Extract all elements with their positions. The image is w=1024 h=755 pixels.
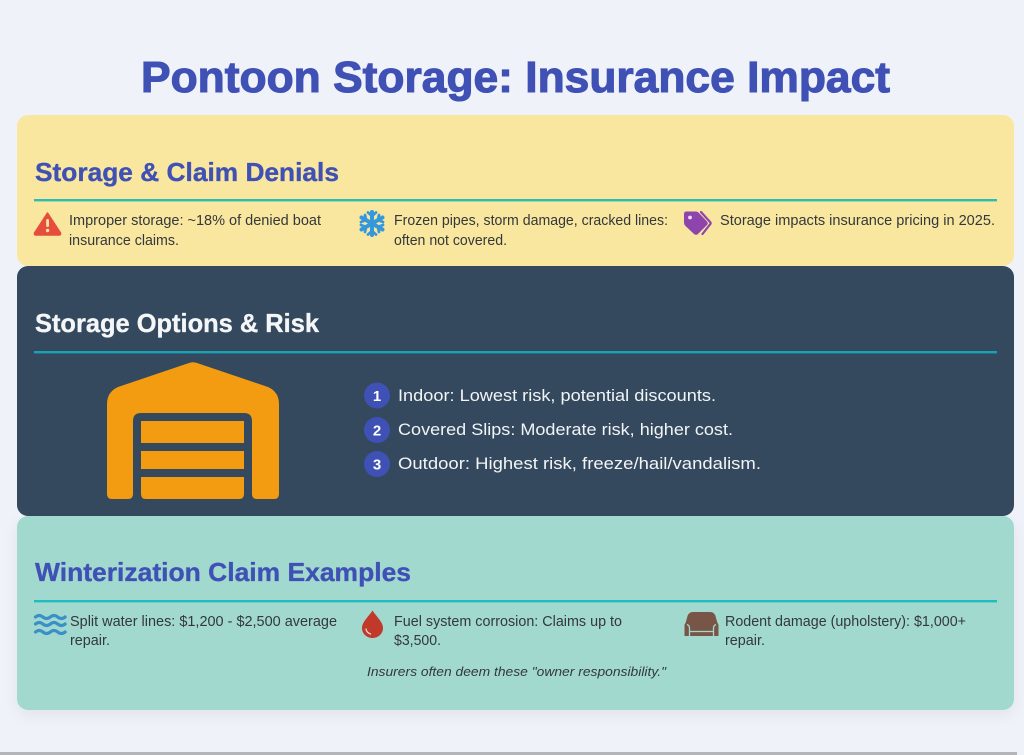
text: fuel system corrosion: $3,500.	[394, 633, 441, 649]
icon: snowflake	[361, 212, 383, 235]
page footer bar	[0, 752, 1017, 755]
heading: storage options and risk: Storage Options & Risk	[35, 308, 320, 338]
item: outdoor: 3	[373, 456, 381, 474]
icon: water waves	[36, 616, 65, 634]
text: frozen pipes: Frozen pipes, storm damage, cracked lines:	[394, 213, 668, 229]
text: split water lines: repair.	[70, 633, 110, 649]
icon: garage warehouse	[107, 362, 279, 499]
item: outdoor	[364, 451, 761, 477]
item: indoor: 1	[373, 388, 381, 405]
icon: price tags	[684, 212, 711, 235]
item: covered slips: Covered Slips: Moderate risk, higher cost.	[398, 421, 733, 439]
text: frozen pipes: often not covered.	[394, 233, 507, 249]
panel: winterization claim examples	[17, 516, 1014, 710]
item: outdoor: Outdoor: Highest risk, freeze/hail/vandalism.	[398, 455, 761, 473]
item: indoor	[364, 382, 716, 408]
title: Pontoon Storage: Insurance Impact	[141, 53, 890, 102]
heading: storage and claim denials: Storage & Claim Denials	[35, 157, 339, 187]
text: improper storage: Improper storage: ~18% of denied boat	[69, 213, 321, 229]
item: covered slips: 2	[373, 422, 381, 440]
item: indoor: Indoor: Lowest risk, potential discounts.	[398, 387, 716, 405]
item: covered slips	[364, 417, 733, 443]
icon: fuel drop	[362, 610, 383, 638]
heading: winterization claim examples: Winterization Claim Examples	[35, 557, 411, 587]
list: storage options	[364, 382, 761, 477]
icon: warning triangle	[34, 213, 61, 235]
panel: storage and claim denials	[17, 115, 1014, 266]
panel: storage options and risk	[17, 266, 1014, 516]
text: storage impacts pricing: Storage impacts insurance pricing in 2025.	[720, 213, 995, 229]
text: improper storage: insurance claims.	[69, 233, 179, 249]
note: owner responsibility: Insurers often deem these "owner responsibility."	[367, 664, 667, 679]
text: rodent damage: Rodent damage (upholstery): $1,000+	[725, 614, 966, 630]
text: rodent damage: repair.	[725, 633, 765, 649]
text: fuel system corrosion: Fuel system corrosion: Claims up to	[394, 614, 622, 630]
icon: sofa	[684, 612, 718, 636]
text: split water lines: Split water lines: $1,200 - $2,500 average	[70, 614, 337, 630]
